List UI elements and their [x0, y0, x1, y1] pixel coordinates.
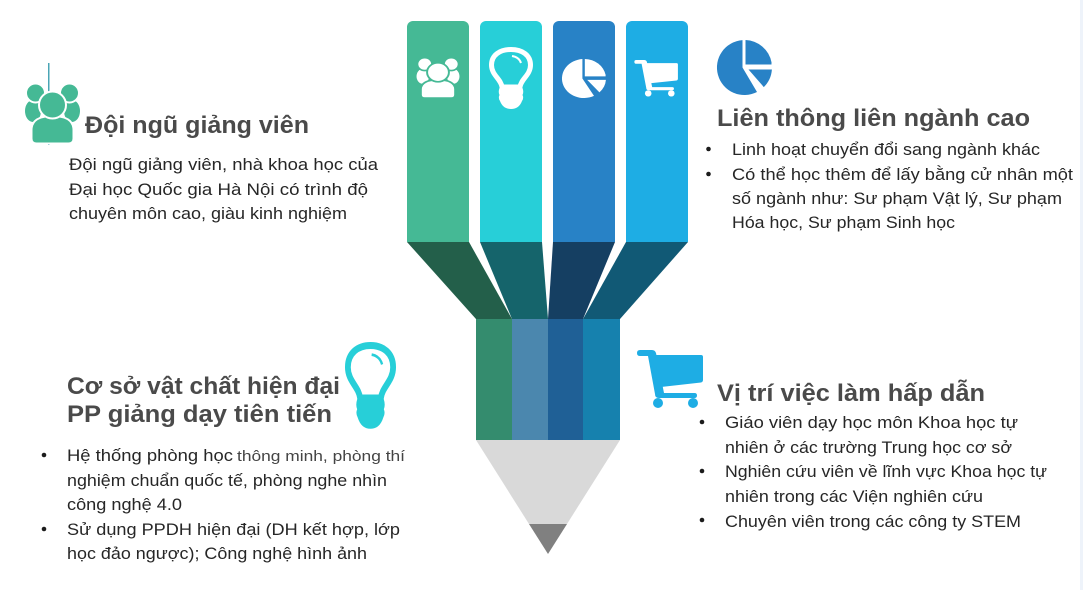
icon: shopping cart blue [637, 350, 703, 408]
panel: interdisciplinary [706, 40, 1073, 232]
column 1: teal green with people icon [407, 21, 512, 440]
panel: facilities and teaching methods [42, 346, 406, 563]
text block: jobs bullets: nhiên trong các Viện nghiên cứu [725, 488, 983, 506]
text block: facilities bullets [42, 447, 406, 563]
text block: interdisciplinary bullets: số ngành như: Sư phạm Vật lý, Sư phạm [732, 190, 1062, 208]
text block: facilities bullets: học đảo ngược); Công nghệ hình ảnh [67, 545, 367, 563]
text block: jobs bullets: Giáo viên dạy học môn Khoa học tự [725, 414, 1018, 432]
icon: pie chart blue [717, 40, 772, 95]
text block: interdisciplinary bullets: Linh hoạt chuyển đổi sang ngành khác [732, 141, 1040, 159]
panel: teaching staff [25, 63, 379, 223]
text block: interdisciplinary bullets [706, 141, 1073, 232]
column 2: cyan with bulb icon [480, 21, 548, 440]
heading: interdisciplinary: Liên thông liên ngành cao [717, 105, 1030, 132]
column 3: blue with pie icon [548, 21, 615, 440]
icon: people [417, 58, 459, 98]
text block: interdisciplinary bullets: Hóa học, Sư phạm Sinh học [732, 214, 955, 232]
pencil infographic [407, 21, 688, 554]
pencil tip [476, 440, 620, 554]
icon: shopping cart [634, 60, 678, 97]
icon: people green [25, 63, 80, 145]
icon: light bulb [492, 50, 530, 109]
heading: facilities and teaching methods [67, 373, 340, 428]
text block: facilities bullets: Hệ thống phòng học [67, 447, 233, 465]
text block: teaching staff description: Đại học Quốc gia Hà Nội có trình độ [69, 181, 368, 199]
text block: jobs bullets: Nghiên cứu viên về lĩnh vực Khoa học tự [725, 463, 1047, 481]
icon: pie chart [562, 59, 606, 98]
text block: teaching staff description [69, 156, 379, 223]
text block: teaching staff description: chuyên môn cao, giàu kinh nghiệm [69, 205, 347, 223]
text block: jobs bullets: Chuyên viên trong các công ty STEM [725, 513, 1021, 531]
text block: jobs bullets [700, 414, 1047, 531]
text block: interdisciplinary bullets: Có thể học thêm để lấy bằng cử nhân một [732, 165, 1073, 184]
text block: teaching staff description: Đội ngũ giảng viên, nhà khoa học của [69, 156, 379, 174]
heading: attractive jobs: Vị trí việc làm hấp dẫn [717, 379, 985, 407]
heading: teaching staff: Đội ngũ giảng viên [85, 112, 309, 139]
text block: jobs bullets: nhiên ở các trường Trung học cơ sở [725, 439, 1012, 457]
heading: facilities and teaching methods: PP giảng dạy tiên tiến [67, 401, 332, 428]
text block: facilities bullets: Sử dụng PPDH hiện đại (DH kết hợp, lớp [67, 521, 400, 539]
text block: facilities bullets: công nghệ 4.0 [67, 496, 182, 514]
panel: attractive jobs [637, 350, 1047, 531]
column 4: sky blue with cart icon [583, 21, 688, 440]
text block: facilities bullets: thông minh, phòng thí [237, 448, 406, 465]
text block: facilities bullets: nghiệm chuẩn quốc tế, phòng nghe nhìn [67, 472, 387, 490]
heading: facilities and teaching methods: Cơ sở vật chất hiện đại [67, 373, 340, 400]
icon: light bulb cyan [348, 346, 393, 429]
